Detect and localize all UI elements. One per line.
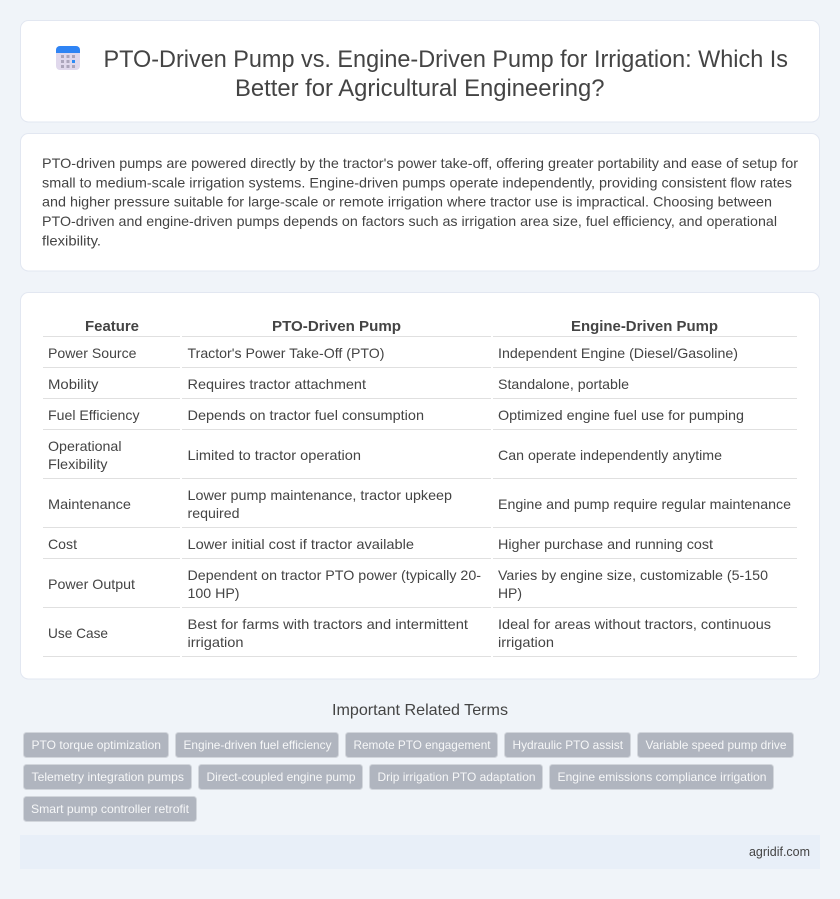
tag: Variable speed pump drive <box>646 738 787 752</box>
row: use case: irrigation <box>498 634 554 650</box>
tag: Engine emissions compliance irrigation <box>558 770 766 784</box>
row: maintenance: Maintenance <box>48 496 131 512</box>
row: fuel efficiency <box>48 407 744 423</box>
row: mobility <box>48 376 629 392</box>
tag <box>370 764 542 790</box>
tag <box>24 732 168 758</box>
tag: Telemetry integration pumps <box>32 770 184 784</box>
row: cost: Cost <box>48 536 77 552</box>
row: power output: Dependent on tractor PTO power (typically 20- <box>188 567 481 583</box>
row: operational flexibility: Limited to tractor operation <box>188 447 361 463</box>
tag <box>176 732 338 758</box>
row: operational flexibility: Can operate independently anytime <box>498 447 722 463</box>
row: use case <box>48 616 771 650</box>
footer: agridif.com <box>749 845 810 859</box>
row: use case: irrigation <box>188 634 244 650</box>
tag: Smart pump controller retrofit <box>31 802 190 816</box>
table header row: Feature <box>85 319 139 335</box>
title: PTO-Driven Pump vs. Engine-Driven Pump for Irrigation: Which Is <box>104 46 788 73</box>
footer <box>20 835 820 869</box>
row: cost: Higher purchase and running cost <box>498 536 713 552</box>
row: power output: HP) <box>498 585 522 601</box>
row: power output: 100 HP) <box>188 585 240 601</box>
tag: PTO torque optimization <box>32 738 161 752</box>
table header row <box>85 319 718 335</box>
row: maintenance: Engine and pump require regular maintenance <box>498 496 791 512</box>
tag <box>504 732 630 758</box>
tag: Drip irrigation PTO adaptation <box>378 770 536 784</box>
row: maintenance <box>48 487 791 521</box>
tag: Remote PTO engagement <box>354 738 491 752</box>
tag <box>638 732 794 758</box>
description text: small to medium-scale irrigation systems. Engine-driven pumps operate independently, providing consistent flow rates <box>42 174 792 190</box>
row: power output: Power Output <box>48 576 135 592</box>
row: power source: Power Source <box>48 345 137 361</box>
tag <box>198 764 362 790</box>
row: mobility: Mobility <box>48 376 98 392</box>
row: use case: Use Case <box>48 625 108 641</box>
table header row: Engine-Driven Pump <box>571 319 718 335</box>
row: cost: Lower initial cost if tractor available <box>188 536 414 552</box>
panel: title header <box>20 20 820 122</box>
row: power source: Tractor's Power Take-Off (PTO) <box>188 345 384 361</box>
description text: PTO-driven and engine-driven pumps depends on factors such as irrigation area size, fuel efficiency, and operational <box>42 213 777 229</box>
row: operational flexibility: Operational <box>48 438 122 454</box>
description text: and higher pressure suitable for large-scale or remote irrigation where tractor use is impractical. Choosing between <box>42 194 772 210</box>
title: Better for Agricultural Engineering? <box>235 75 604 102</box>
title <box>104 46 788 102</box>
row: mobility: Standalone, portable <box>498 376 629 392</box>
tag <box>24 796 196 822</box>
tag: Direct-coupled engine pump <box>206 770 356 784</box>
tag <box>346 732 498 758</box>
row: fuel efficiency: Fuel Efficiency <box>48 407 140 423</box>
description text: PTO-driven pumps are powered directly by the tractor's power take-off, offering greater portability and ease of setup for <box>42 155 798 171</box>
row: power output <box>48 567 768 601</box>
row: maintenance: Lower pump maintenance, tractor upkeep <box>188 487 452 503</box>
tag <box>24 764 192 790</box>
row: fuel efficiency: Depends on tractor fuel consumption <box>188 407 424 423</box>
icon: calendar <box>56 46 80 70</box>
row: operational flexibility: Flexibility <box>48 456 108 472</box>
row: cost <box>48 536 713 552</box>
row: power source <box>48 345 738 361</box>
row: operational flexibility <box>48 438 722 472</box>
description text: flexibility. <box>42 232 101 248</box>
row: use case: Best for farms with tractors and intermittent <box>188 616 468 632</box>
row: mobility: Requires tractor attachment <box>188 376 366 392</box>
row: power output: Varies by engine size, customizable (5-150 <box>498 567 768 583</box>
row: use case: Ideal for areas without tractors, continuous <box>498 616 771 632</box>
related term tags <box>24 732 794 822</box>
row: power source: Independent Engine (Diesel/Gasoline) <box>498 345 738 361</box>
heading: important related terms: Important Related Terms <box>332 702 508 719</box>
panel: description <box>20 134 820 271</box>
tag: Engine-driven fuel efficiency <box>184 738 332 752</box>
tag: Hydraulic PTO assist <box>512 738 624 752</box>
row: fuel efficiency: Optimized engine fuel use for pumping <box>498 407 744 423</box>
panel: comparison table <box>20 292 820 679</box>
row: maintenance: required <box>188 505 240 521</box>
table header row: PTO-Driven Pump <box>272 319 401 335</box>
tag <box>550 764 774 790</box>
description text <box>42 155 798 248</box>
